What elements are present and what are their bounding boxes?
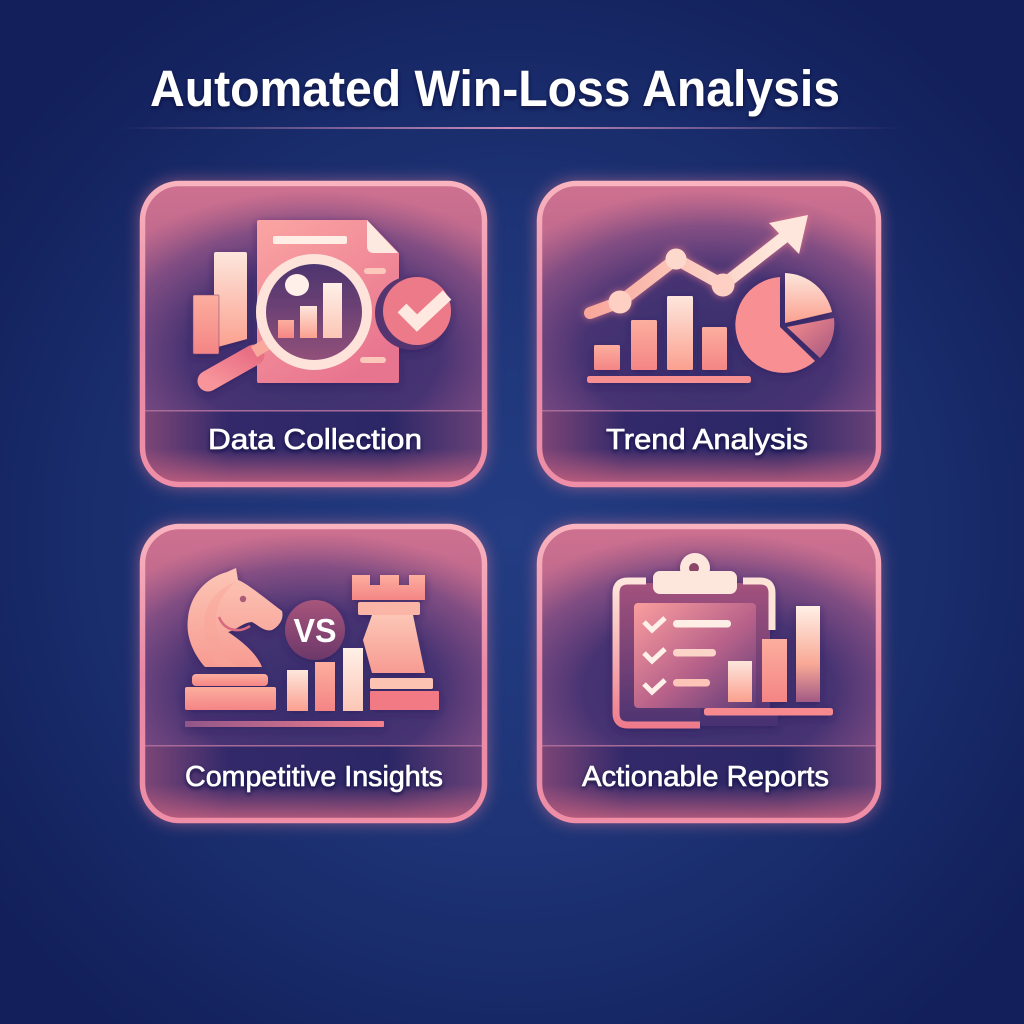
card frame bbox=[537, 181, 881, 487]
pie chart bbox=[735, 273, 834, 373]
title: Automated Win-Loss Analysis bbox=[150, 60, 840, 117]
label: Actionable Reports bbox=[582, 761, 829, 793]
rook bbox=[352, 575, 439, 710]
knight bbox=[185, 568, 283, 710]
panel: data collection bbox=[140, 181, 487, 487]
icon: trend chart bbox=[587, 215, 834, 383]
bars bbox=[287, 648, 363, 711]
card frame bbox=[140, 524, 487, 823]
clipboard outline bbox=[616, 581, 772, 725]
icon part: bars bbox=[193, 252, 247, 354]
icon: data collection bbox=[193, 220, 451, 383]
baseline bbox=[185, 721, 384, 727]
paper bbox=[634, 603, 756, 708]
panel: trend analysis bbox=[537, 181, 881, 487]
panel: competitive insights bbox=[140, 524, 487, 823]
icon part: magnifier bbox=[208, 259, 367, 381]
clip bbox=[653, 553, 737, 594]
bars bbox=[700, 606, 833, 726]
icon: chess versus bbox=[185, 568, 439, 727]
trend line with arrow bbox=[590, 215, 808, 314]
checklist bbox=[644, 618, 731, 692]
label: Trend Analysis bbox=[606, 424, 808, 456]
label: Competitive Insights bbox=[185, 761, 443, 793]
card frame bbox=[140, 181, 487, 487]
bars bbox=[587, 296, 751, 383]
versus badge bbox=[285, 600, 345, 660]
versus badge: VS bbox=[294, 612, 336, 649]
icon part: check badge bbox=[375, 276, 451, 350]
card frame bbox=[537, 524, 881, 823]
icon part: document bbox=[257, 220, 399, 383]
panel: actionable reports bbox=[537, 524, 881, 823]
icon: clipboard report bbox=[616, 553, 833, 726]
label: Data Collection bbox=[208, 424, 422, 456]
